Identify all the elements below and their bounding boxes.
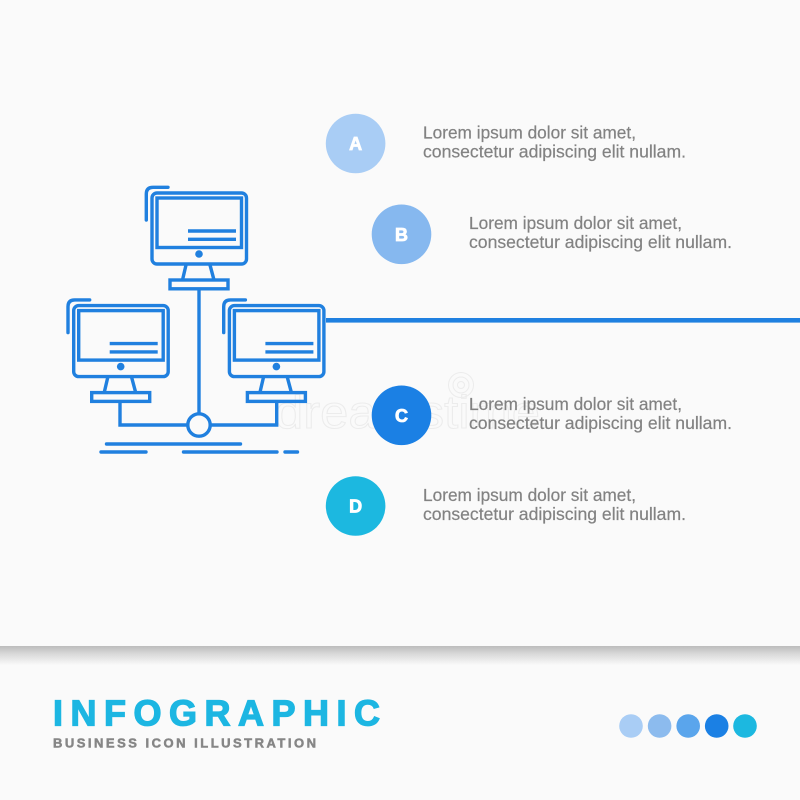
badge C: C <box>395 406 408 426</box>
monitor: right <box>224 300 324 401</box>
text A: consectetur adipiscing elit nullam. <box>423 141 686 161</box>
badge B: B <box>395 225 408 245</box>
text A: Lorem ipsum dolor sit amet, <box>423 122 636 142</box>
text C: consectetur adipiscing elit nullam. <box>469 413 732 433</box>
item A <box>326 114 686 173</box>
text C: Lorem ipsum dolor sit amet, <box>469 394 682 414</box>
item B <box>372 204 732 264</box>
badge A <box>326 114 385 173</box>
colour dots <box>619 714 757 738</box>
subtitle: BUSINESS ICON ILLUSTRATION <box>53 736 316 751</box>
text D: Lorem ipsum dolor sit amet, <box>423 485 636 505</box>
ground lines <box>101 444 298 452</box>
monitor: top <box>146 187 246 289</box>
text B: Lorem ipsum dolor sit amet, <box>469 213 682 233</box>
badge C <box>372 386 431 445</box>
item C <box>372 386 732 445</box>
badge A: A <box>349 134 362 154</box>
badge D <box>326 476 385 536</box>
title: INFOGRAPHIC <box>53 693 380 734</box>
horizontal connector line <box>326 318 800 323</box>
footer shadow band <box>0 646 800 665</box>
network connectors <box>120 289 277 436</box>
icon: networked computers <box>68 187 324 452</box>
watermark: dreamstime <box>275 386 540 438</box>
text D: consectetur adipiscing elit nullam. <box>423 504 686 524</box>
badge D: D <box>349 496 362 516</box>
item D <box>326 476 686 536</box>
badge B <box>372 204 431 264</box>
text B: consectetur adipiscing elit nullam. <box>469 232 732 252</box>
monitor: left <box>68 300 168 401</box>
